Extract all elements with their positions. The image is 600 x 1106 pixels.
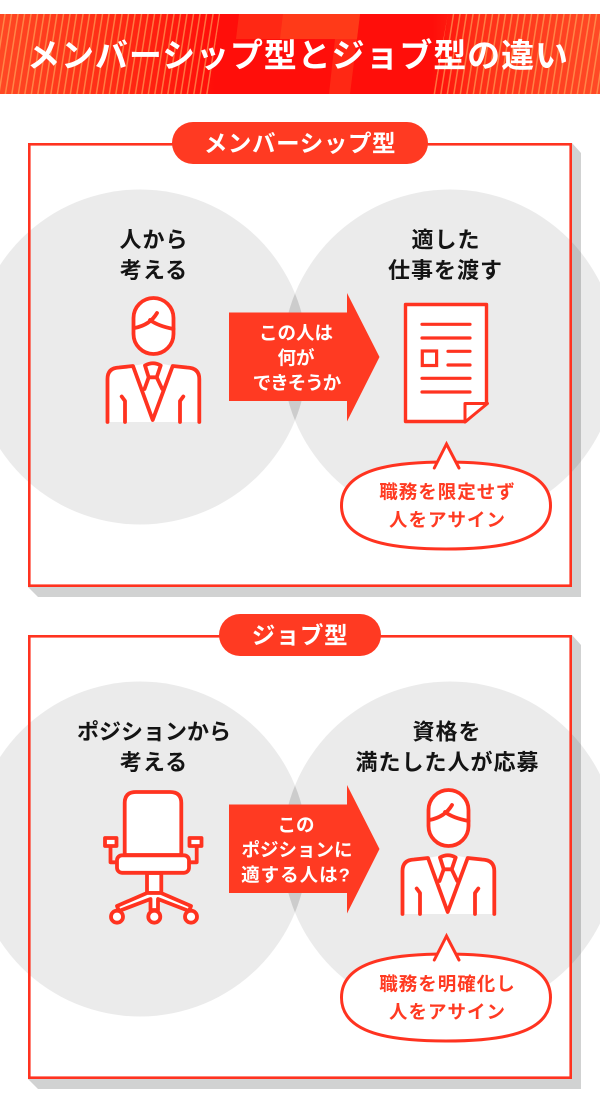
arrow: 何が — [277, 348, 315, 368]
left circle — [0, 190, 308, 524]
title banner — [0, 14, 600, 94]
arrow: この人は — [259, 322, 333, 344]
heading: start from person — [119, 228, 189, 283]
arrow: ポジションに — [241, 840, 353, 860]
callout — [342, 936, 550, 1041]
left circle — [0, 682, 308, 1016]
icon: document — [406, 304, 488, 422]
heading: start from person: 人から — [119, 228, 189, 252]
panel: membership type — [0, 122, 600, 597]
panel: job type — [0, 614, 600, 1089]
callout — [342, 444, 550, 549]
callout: 職務を明確化し — [379, 974, 516, 994]
heading: suitable work — [388, 228, 503, 283]
arrow — [229, 785, 380, 914]
heading: start from position: 考える — [120, 750, 188, 775]
icon: person — [402, 790, 494, 914]
heading: start from position: ポジションから — [77, 720, 231, 744]
heading: start from position — [77, 720, 231, 775]
heading: suitable work: 仕事を渡す — [388, 258, 503, 283]
pill heading — [219, 614, 381, 656]
heading: qualified applicants: 資格を — [412, 720, 482, 744]
panel shadow — [28, 143, 581, 597]
icon: office chair — [105, 792, 202, 923]
arrow — [229, 293, 380, 422]
heading: start from person: 考える — [120, 258, 188, 283]
callout: 人をアサイン — [389, 1002, 506, 1022]
heading: suitable work: 適した — [411, 228, 481, 252]
right circle — [282, 190, 600, 524]
arrow: 適する人は? — [241, 864, 351, 886]
right circle — [282, 682, 600, 1016]
callout: 人をアサイン — [389, 510, 506, 530]
panel shadow — [28, 635, 581, 1089]
pill heading: ジョブ型 — [252, 622, 348, 648]
callout: 職務を限定せず — [379, 482, 516, 502]
pill heading: メンバーシップ型 — [204, 130, 396, 156]
heading: qualified applicants — [355, 720, 540, 775]
pill heading — [172, 122, 428, 164]
heading: qualified applicants: 満たした人が応募 — [355, 750, 540, 775]
icon: person — [108, 298, 199, 422]
title: メンバーシップ型とジョブ型の違い — [27, 37, 569, 74]
arrow: できそうか — [253, 372, 342, 394]
arrow: この — [277, 814, 315, 836]
